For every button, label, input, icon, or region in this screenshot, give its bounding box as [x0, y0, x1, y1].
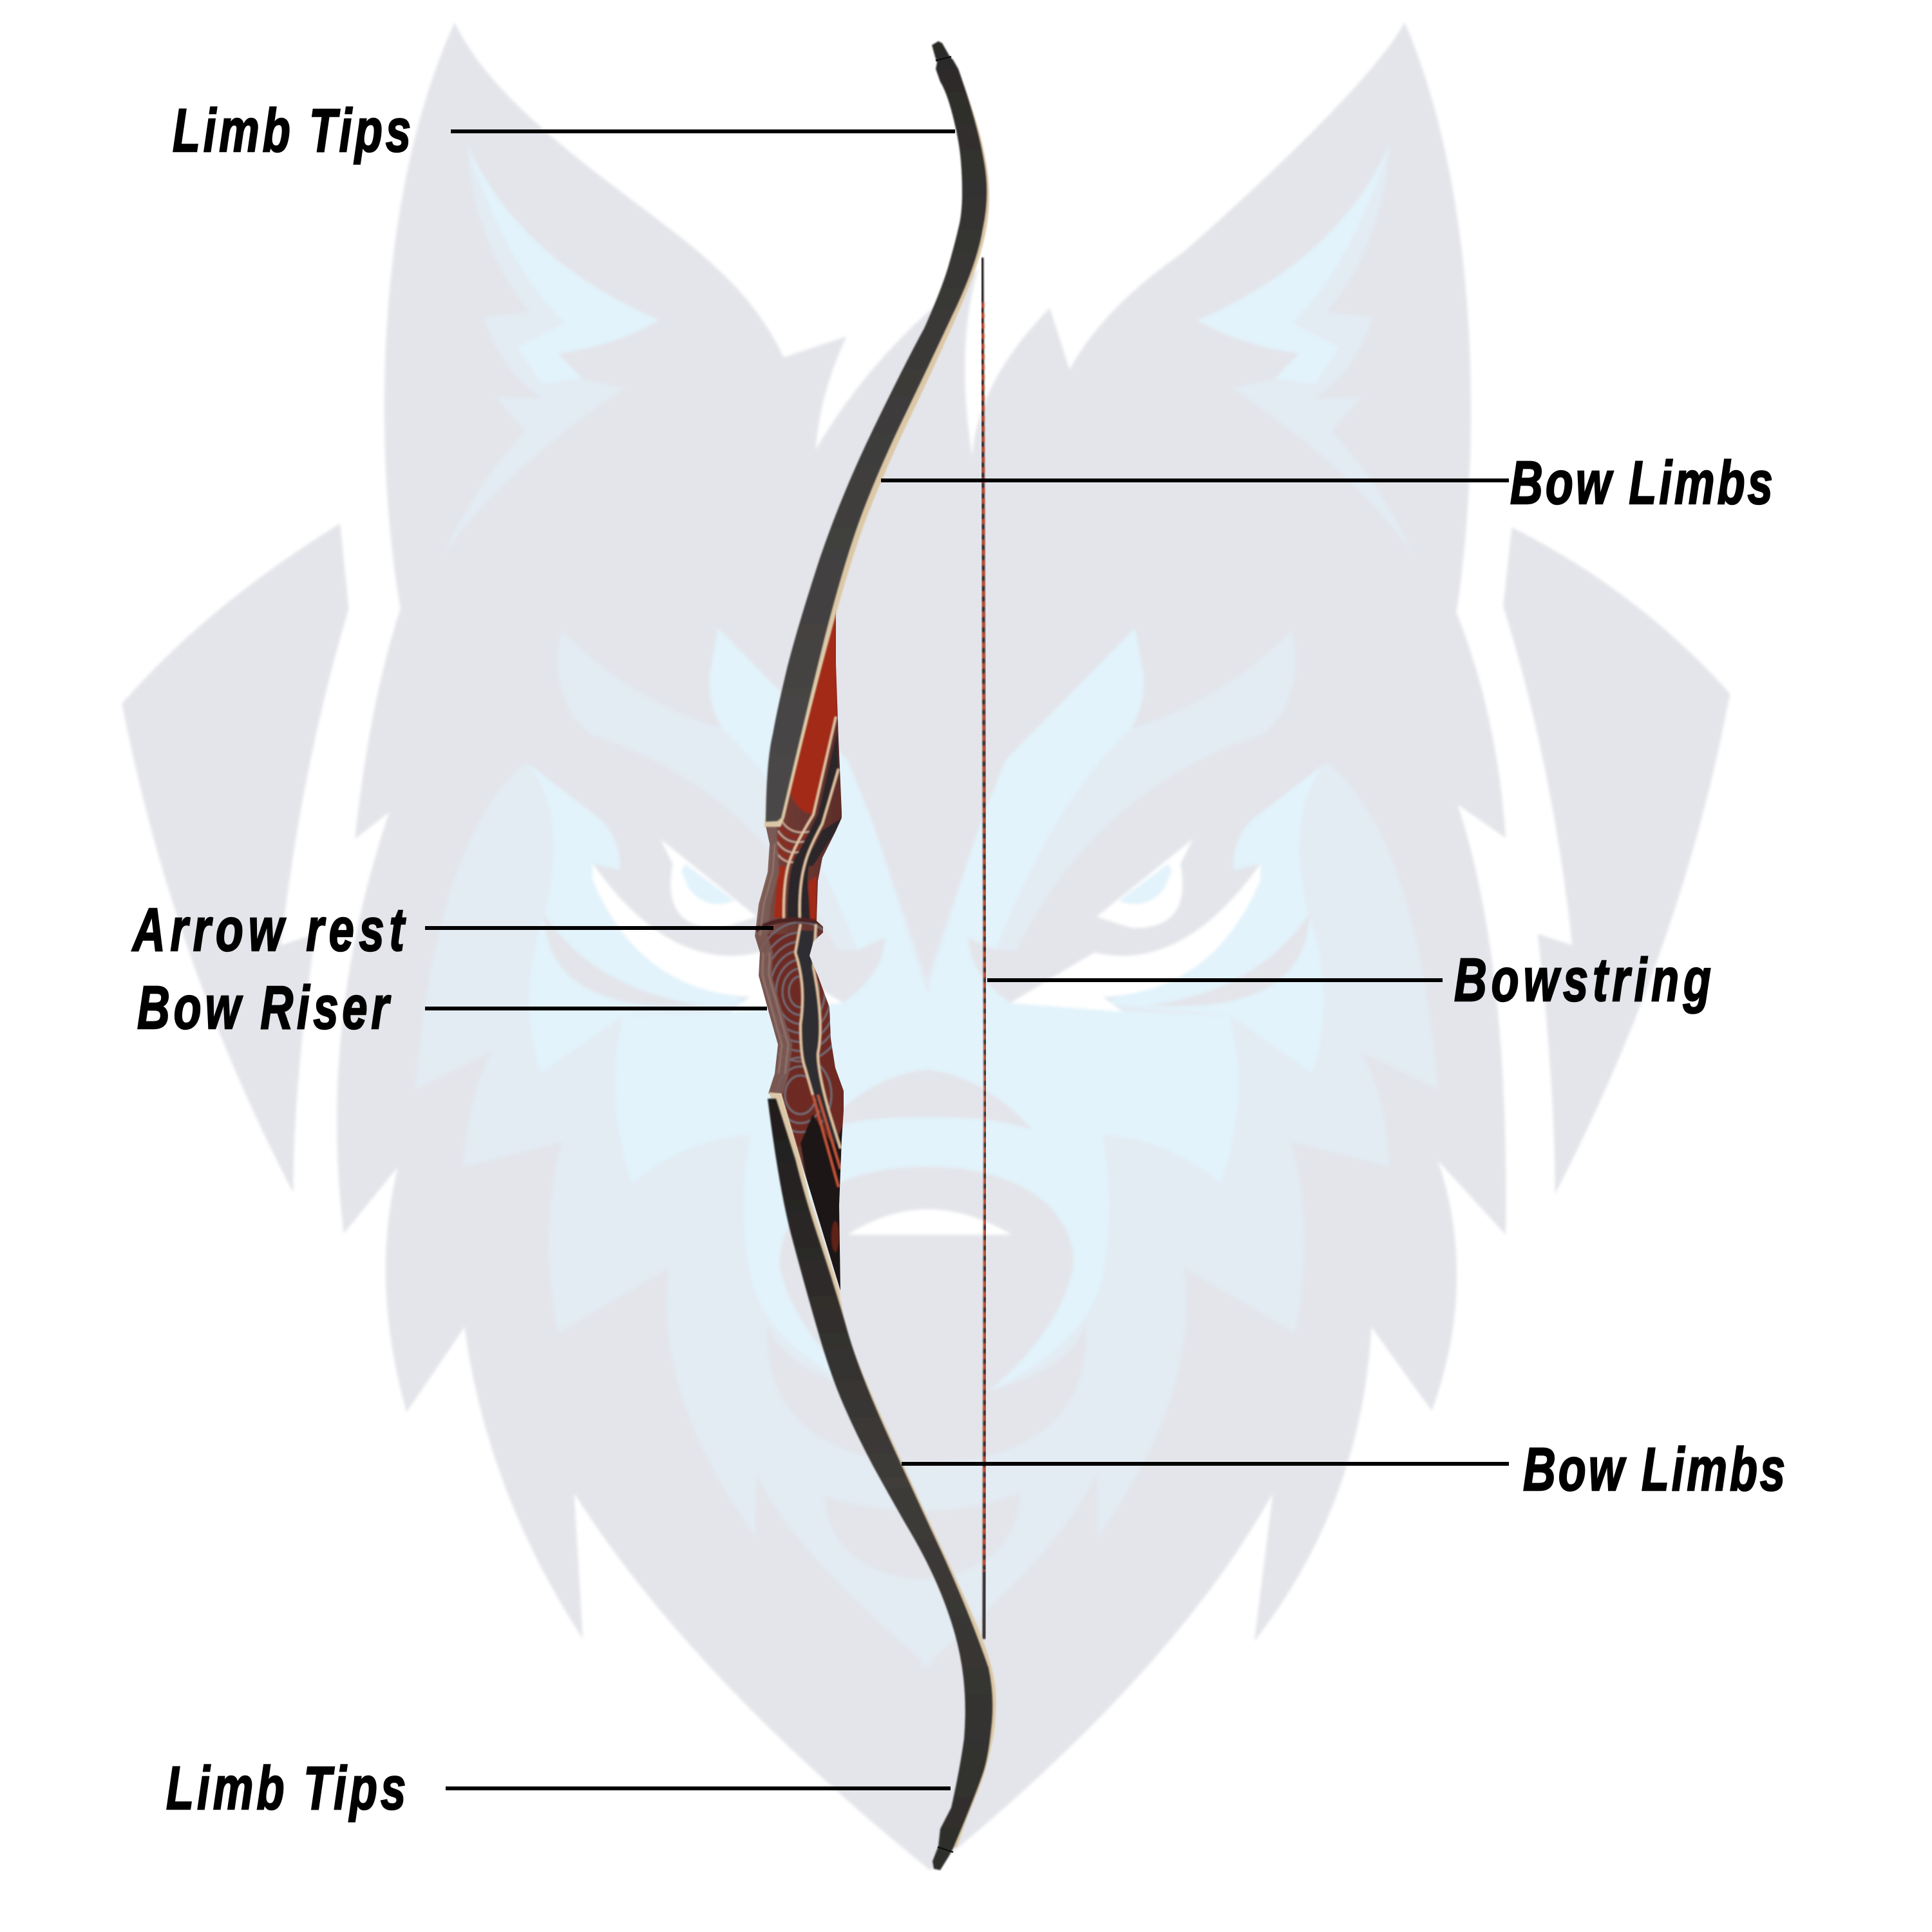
mouth highlight	[848, 1209, 1012, 1235]
upper contour rings	[775, 819, 813, 862]
riser	[755, 611, 844, 1291]
callout: limb tips bottom: Limb Tips	[166, 1754, 406, 1822]
left rim grain	[755, 844, 788, 1074]
callout: bow limbs top: Bow Limbs	[1510, 448, 1773, 516]
lower limb tan edge	[768, 1092, 996, 1848]
left face markings	[415, 629, 931, 1669]
left ear marking	[444, 144, 659, 554]
bow	[747, 41, 996, 1870]
callout: arrow rest	[131, 895, 773, 963]
callout: limb tips top	[173, 96, 955, 164]
callout: limb tips top: Limb Tips	[173, 96, 411, 164]
callout: bow limbs top	[881, 448, 1773, 516]
red pockets near shelf	[774, 866, 786, 918]
upper limb and tip	[766, 41, 987, 822]
dark upper core	[787, 732, 838, 921]
left rim overlay	[755, 827, 793, 1095]
right face markings	[922, 629, 1438, 1669]
callout: bow limbs bottom	[902, 1435, 1785, 1503]
black lower panel	[800, 1114, 845, 1291]
callout: bow riser: Bow Riser	[137, 973, 391, 1041]
right cheek fur	[1503, 527, 1730, 1194]
callout: arrow rest: Arrow rest	[131, 895, 406, 963]
red glow lower panel	[831, 1221, 839, 1252]
callout: bowstring	[987, 945, 1711, 1014]
right ear marking	[1198, 144, 1414, 554]
laminate stripes	[784, 717, 840, 1187]
wolf head silhouette	[337, 22, 1506, 1870]
lower contour rings	[767, 921, 844, 1146]
upper limb tan edge	[764, 64, 989, 827]
callout: limb tips bottom	[166, 1754, 951, 1822]
shelf	[755, 920, 823, 931]
wolf logo watermark	[122, 22, 1730, 1870]
upper nock groove	[936, 57, 951, 61]
callout: bowstring: Bowstring	[1454, 945, 1711, 1014]
callout: bow riser	[137, 973, 767, 1041]
red upper panel	[789, 609, 837, 815]
callout: bow limbs bottom: Bow Limbs	[1523, 1435, 1785, 1503]
left cheek fur	[122, 524, 348, 1193]
chin shape	[824, 1493, 1020, 1580]
lower nock groove	[938, 1847, 953, 1852]
bowstring	[982, 258, 985, 1639]
lower limb and tip	[768, 1099, 992, 1870]
dark lower core	[796, 930, 840, 1145]
